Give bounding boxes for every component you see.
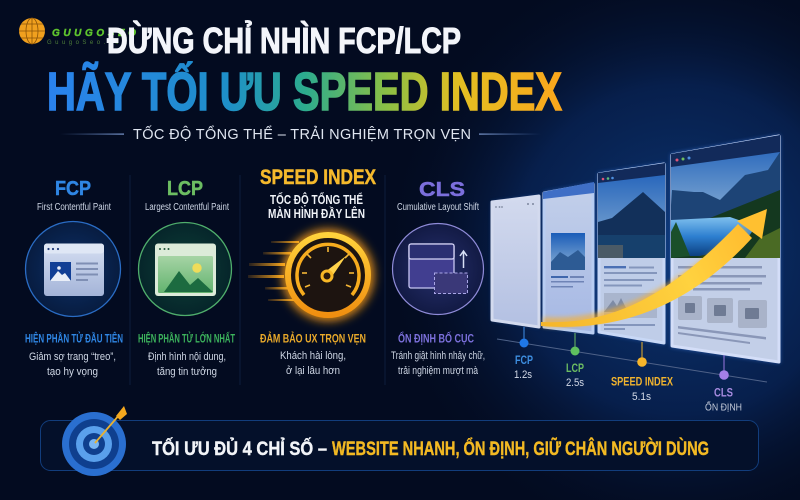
marker FCP: FCP: [515, 355, 533, 367]
CLS description: [391, 330, 485, 377]
FCP heading: FCP: [55, 178, 91, 200]
subtitle with rules: TỐC ĐỘ TỔNG THỂ – TRẢI NGHIỆM TRỌN VẸN: [133, 125, 471, 143]
marker LCP: [566, 346, 584, 389]
panel: CLS: [391, 179, 485, 377]
FCP description: Giảm sợ trang “treo”,: [29, 351, 116, 363]
marker Speed Index: [611, 357, 673, 403]
Speed Index description: ĐẢM BẢO UX TRỌN VẸN: [260, 330, 366, 346]
logo: GuugoSeo: [19, 18, 136, 46]
marker CLS: CLS: [714, 386, 733, 400]
panel: CLS: Cumulative Layout Shift: [397, 202, 479, 213]
panel: FCP: First Contentful Paint: [37, 202, 111, 213]
panel: FCP: [25, 178, 123, 378]
banner text: [152, 436, 709, 460]
logo: GuugoSeo: GUUGOSEO: [52, 28, 136, 39]
Speed Index heading: SPEED INDEX: [260, 166, 376, 189]
panel: LCP: Largest Contentful Paint: [145, 202, 229, 213]
panel: LCP: [138, 178, 235, 378]
CLS description: ỔN ĐỊNH BỐ CỤC: [398, 330, 474, 346]
marker FCP: 1.2s: [514, 369, 532, 381]
logo: GuugoSeo: GuugoSeo.com: [47, 40, 127, 46]
screen 1: [492, 196, 539, 327]
LCP description: tăng tin tưởng: [157, 366, 217, 378]
panel: Speed Index: [248, 166, 376, 377]
Speed Index subheading: [268, 192, 365, 221]
marker LCP: LCP: [566, 363, 584, 375]
Speed Index subheading: MÀN HÌNH ĐẦY LÊN: [268, 206, 365, 221]
marker Speed Index: 5.1s: [632, 391, 651, 403]
FCP description: tạo hy vọng: [47, 366, 98, 378]
icon: FCP browser window: [26, 222, 120, 316]
Speed Index description: ở lại lâu hơn: [286, 365, 340, 377]
marker FCP: [514, 338, 533, 381]
filmstrip: page load screens: [492, 135, 780, 363]
icon: target with arrow: [62, 406, 127, 476]
growth arrow: [541, 209, 767, 327]
Speed Index description: Khách hài lòng,: [280, 350, 346, 362]
title block: [47, 19, 562, 143]
LCP description: HIỆN PHẦN TỬ LỚN NHẤT: [138, 330, 235, 346]
title line 1: ĐỪNG CHỈ NHÌN FCP/LCP: [107, 19, 461, 61]
banner text: TỐI ƯU ĐỦ 4 CHỈ SỐ –: [152, 436, 327, 460]
icon: LCP browser window: [138, 222, 232, 316]
icon: layout shift: [392, 224, 484, 314]
FCP description: [25, 330, 123, 378]
timeline: [497, 327, 767, 414]
LCP heading: LCP: [167, 178, 203, 200]
marker LCP: 2.5s: [566, 377, 584, 389]
Speed Index description: [260, 330, 366, 377]
screen 3: [598, 163, 665, 344]
bottom banner: [40, 406, 758, 476]
Speed Index subheading: TỐC ĐỘ TỔNG THỂ: [270, 192, 363, 207]
icon: speedometer: [248, 235, 368, 315]
FCP description: HIỆN PHẦN TỬ ĐẦU TIÊN: [25, 330, 123, 346]
LCP description: [138, 330, 235, 378]
screen 4: [671, 135, 780, 363]
CLS heading: CLS: [419, 179, 465, 201]
CLS description: Tránh giật hình nhảy chữ,: [391, 350, 485, 362]
marker CLS: ỔN ĐỊNH: [705, 400, 742, 414]
marker CLS: [705, 370, 742, 414]
LCP description: Định hình nội dung,: [148, 351, 226, 363]
marker Speed Index: SPEED INDEX: [611, 374, 673, 388]
screen 2: [543, 182, 594, 333]
CLS description: trải nghiệm mượt mà: [398, 365, 479, 377]
title line 2 gradient: HÃY TỐI ƯU SPEED INDEX: [47, 62, 562, 122]
